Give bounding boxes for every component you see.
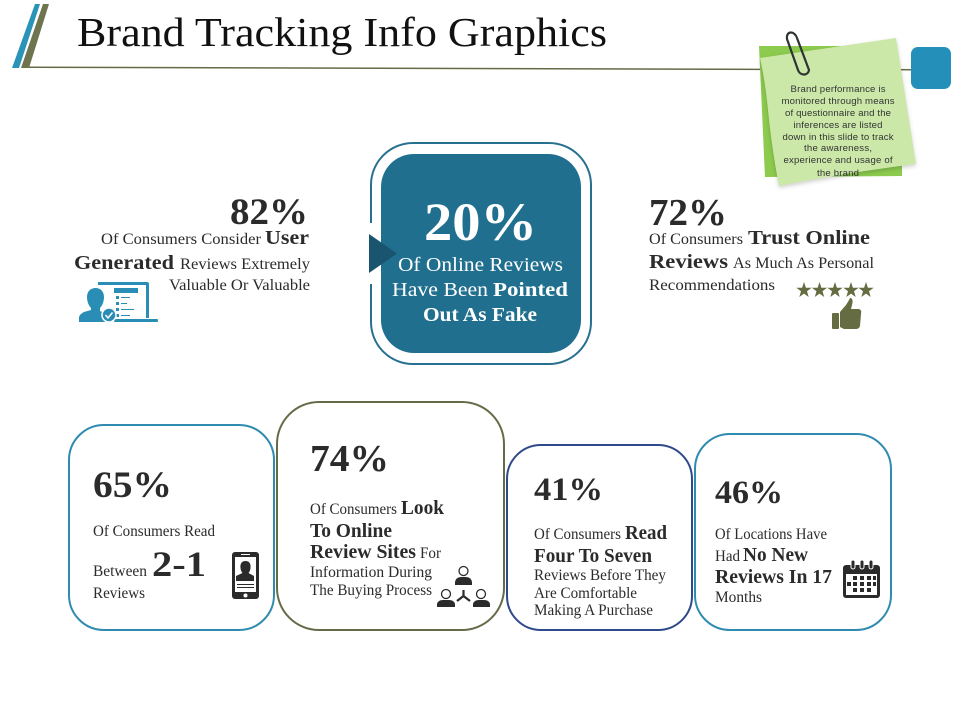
stat: 82% <box>74 192 310 322</box>
note text: down in this slide to track <box>782 132 894 143</box>
description: Of Consumers Consider <box>101 231 262 248</box>
description: Reviews Extremely <box>180 256 310 273</box>
description: Valuable Or Valuable <box>169 277 310 294</box>
description: Reviews In 17 <box>715 567 832 588</box>
icon: calendar <box>843 560 880 598</box>
icon: smartphone profile <box>232 552 259 599</box>
note text: the awareness, <box>804 143 872 154</box>
sticky note <box>759 32 916 186</box>
description: Of Online Reviews <box>398 254 563 276</box>
description: User <box>265 228 309 249</box>
description: Making A Purchase <box>534 602 653 619</box>
description: Look <box>401 498 444 519</box>
value: 82% <box>230 192 308 233</box>
description: Have Been <box>392 279 488 301</box>
card outline <box>695 434 891 630</box>
description <box>649 228 874 294</box>
card outline <box>277 402 504 630</box>
icon: slanted title stripes <box>12 4 49 68</box>
icon: five stars <box>796 282 874 297</box>
description <box>74 228 310 294</box>
description: Reviews Before They <box>534 567 666 584</box>
title: Brand Tracking Info Graphics <box>77 9 607 55</box>
value: 72% <box>649 192 727 234</box>
panel: 65% card <box>69 425 274 630</box>
note text: monitored through means <box>782 96 895 107</box>
description <box>310 498 444 599</box>
description: Review Sites <box>310 542 416 563</box>
description: For <box>420 545 442 562</box>
title rule <box>29 66 912 70</box>
description: Reviews <box>649 252 728 273</box>
note text: of questionnaire and the <box>785 108 891 119</box>
inner panel <box>381 154 581 353</box>
stat: 72% <box>649 192 874 329</box>
note backing <box>759 46 902 177</box>
description: Between <box>93 563 147 580</box>
note text: experience and usage of <box>784 155 893 166</box>
value: 65% <box>93 465 172 506</box>
description: The Buying Process <box>310 582 432 599</box>
arrow pointer <box>369 234 397 273</box>
blue square tab <box>911 47 951 89</box>
description <box>392 254 569 326</box>
description: Of Consumers <box>310 501 397 518</box>
description: Trust Online <box>748 228 870 249</box>
outline gap <box>367 223 375 284</box>
description: Four To Seven <box>534 546 652 567</box>
value: 20% <box>424 192 537 252</box>
description: Of Consumers <box>534 526 621 543</box>
icon: paper clip <box>787 32 809 74</box>
note text: the brand <box>817 168 859 179</box>
description: Had <box>715 548 740 565</box>
description: Information During <box>310 564 432 581</box>
description: To Online <box>310 521 392 542</box>
card outline <box>69 425 274 630</box>
value: 74% <box>310 438 389 480</box>
description: Read <box>625 523 667 544</box>
description <box>534 523 667 619</box>
panel: 46% card <box>695 434 891 630</box>
description: Months <box>715 589 762 606</box>
panel: 74% card <box>277 402 504 630</box>
value: 46% <box>715 475 783 511</box>
note paper <box>760 38 916 186</box>
description: Pointed <box>493 279 569 301</box>
description <box>715 526 832 606</box>
note text: Brand performance is <box>790 84 886 95</box>
panel: 41% card <box>507 445 692 630</box>
panel: central 20% stat <box>367 143 591 364</box>
card outline <box>507 445 692 630</box>
icon: user at laptop <box>79 282 158 322</box>
value: 41% <box>534 472 603 508</box>
description: 2-1 <box>152 544 206 584</box>
description: Are Comfortable <box>534 585 637 602</box>
note text: inferences are listed <box>794 120 882 131</box>
description: Recommendations <box>649 277 775 294</box>
description: Reviews <box>93 585 145 602</box>
description <box>93 523 215 602</box>
description: Of Locations Have <box>715 526 827 543</box>
icon: connected people <box>437 566 490 607</box>
description: Of Consumers <box>649 231 743 248</box>
icon: thumbs up <box>832 298 861 329</box>
description: No New <box>743 545 808 566</box>
description: Of Consumers Read <box>93 523 215 540</box>
description: Generated <box>74 253 174 274</box>
note text <box>782 84 895 179</box>
outer outline <box>371 143 591 364</box>
description: Out As Fake <box>423 304 537 326</box>
description: As Much As Personal <box>733 255 874 272</box>
